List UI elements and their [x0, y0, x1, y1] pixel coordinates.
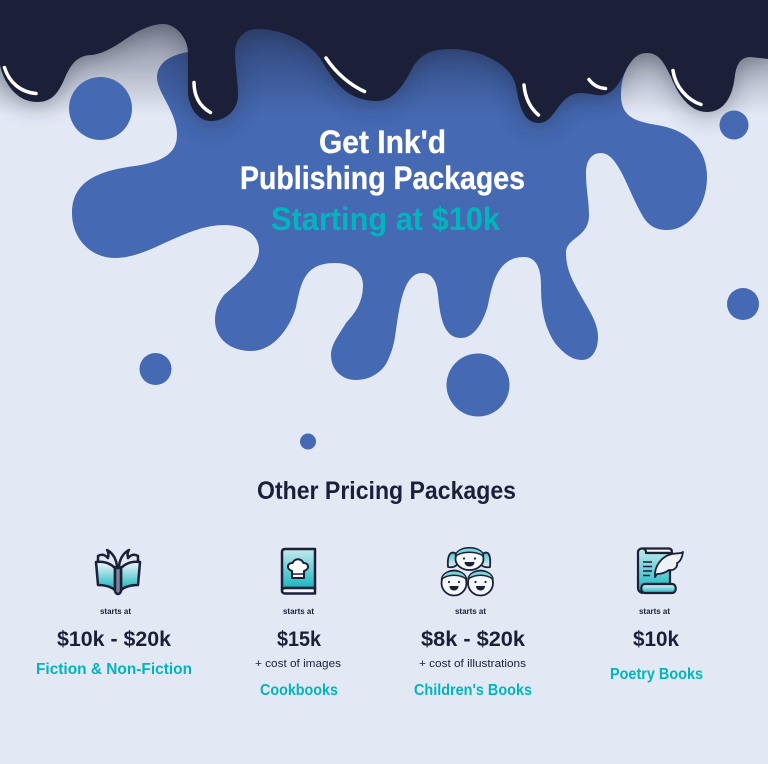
package: cookbooks — [255, 549, 342, 699]
category name: Fiction & Non-Fiction — [36, 661, 192, 678]
price: $15k — [277, 628, 321, 651]
icon: three children — [442, 548, 493, 596]
vertical shadow fade — [0, 20, 768, 115]
price: $10k — [633, 628, 679, 651]
category name: Poetry Books — [610, 666, 703, 683]
additional cost note: + cost of images — [255, 658, 342, 670]
icon: cookbook — [282, 549, 315, 594]
title: Publishing Packages — [240, 160, 525, 196]
category name: Cookbooks — [260, 682, 338, 699]
dark ink drip header — [0, 0, 768, 123]
starts at label: starts at — [283, 607, 314, 616]
package: fiction and non-fiction — [36, 550, 192, 678]
drip highlights — [4, 58, 701, 115]
starts at label: starts at — [100, 607, 131, 616]
title: Starting at $10k — [271, 201, 500, 237]
price: $8k - $20k — [421, 628, 525, 651]
section heading: Other Pricing Packages — [257, 477, 516, 505]
package: children's books — [414, 548, 532, 699]
blue ink splat — [72, 20, 707, 380]
icon: open book — [96, 550, 140, 594]
starts at label: starts at — [455, 607, 486, 616]
category name: Children's Books — [414, 682, 532, 699]
title — [240, 124, 525, 237]
ink splatter droplets — [69, 77, 759, 450]
price: $10k - $20k — [57, 628, 171, 651]
starts at label: starts at — [639, 607, 670, 616]
additional cost note: + cost of illustrations — [419, 658, 527, 670]
title: Get Ink'd — [319, 124, 446, 160]
icon: scroll and quill — [638, 548, 683, 593]
package: poetry books — [610, 548, 703, 683]
shadow beneath dark ink — [0, 3, 768, 126]
